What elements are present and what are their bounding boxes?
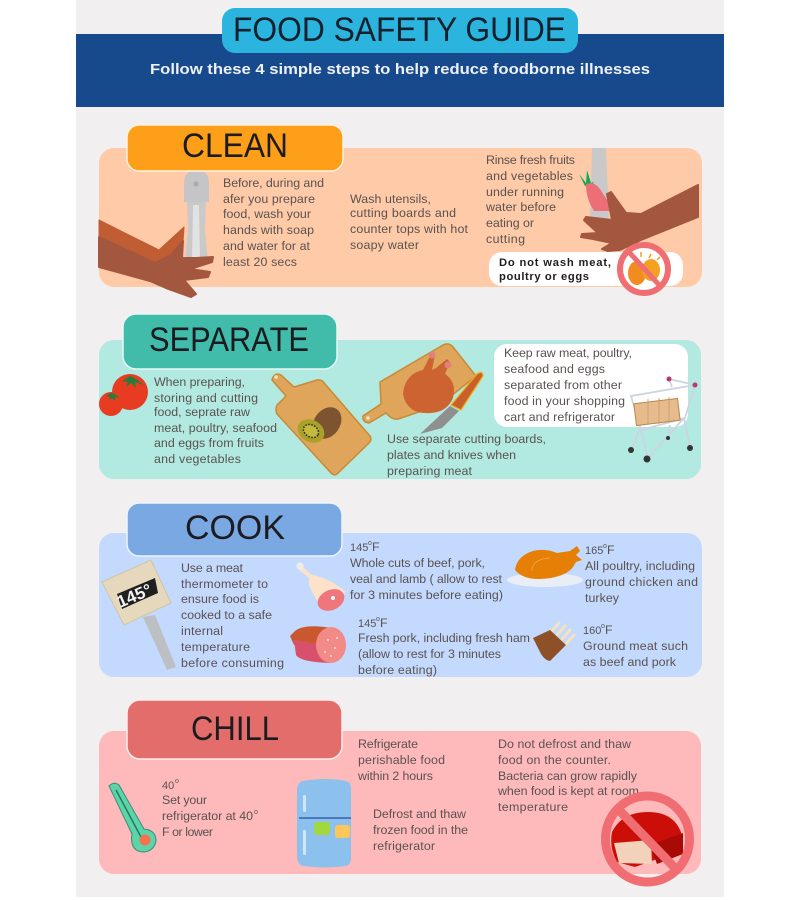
text: do not defrost bbox=[497, 737, 639, 814]
text: hands: Before, during and bbox=[223, 176, 324, 190]
heading: separate: SEPARATE bbox=[149, 321, 309, 359]
text: rinse: cutting bbox=[486, 232, 525, 246]
text: poultry: ground chicken and bbox=[585, 575, 698, 589]
text: rinse: eating or bbox=[486, 216, 534, 230]
icon: cutting board with kiwi bbox=[272, 374, 371, 475]
callout: do not wash meat bbox=[489, 252, 683, 286]
text: utensils: cutting boards and bbox=[350, 206, 456, 220]
heading: chill bbox=[127, 700, 342, 759]
callout: keep raw meat: cart and refrigerator bbox=[504, 410, 615, 424]
panel: clean bbox=[99, 148, 702, 297]
text: preparing: and eggs from fruits bbox=[154, 436, 264, 450]
heading: separate bbox=[123, 314, 337, 369]
heading: chill: CHILL bbox=[191, 710, 279, 748]
text: ground meat: 160 bbox=[583, 625, 601, 637]
text: hands: least 20 secs bbox=[223, 255, 297, 269]
text: poultry: turkey bbox=[585, 591, 620, 605]
text: refrigerate: perishable food bbox=[358, 753, 445, 767]
text: do not defrost: temperature bbox=[498, 800, 568, 814]
panel: separate bbox=[99, 340, 701, 479]
text: separate boards bbox=[387, 432, 546, 478]
text: rinse: water before bbox=[485, 200, 556, 214]
text: hands: and water for at bbox=[223, 239, 311, 253]
icon: ham bbox=[296, 562, 348, 615]
text: separate boards: plates and knives when bbox=[387, 448, 516, 462]
text: refrigerate: Refrigerate bbox=[358, 737, 418, 751]
text: refrigerate bbox=[357, 737, 445, 783]
callout: keep raw meat: separated from other bbox=[504, 378, 622, 392]
text: utensils bbox=[350, 192, 469, 252]
text: hands: food, wash your bbox=[223, 207, 311, 221]
text: fresh pork: o bbox=[376, 616, 380, 623]
text: refrigerator temperature: F or lower bbox=[162, 825, 213, 839]
text: poultry: F bbox=[607, 543, 615, 557]
text: hands: hands with soap bbox=[223, 223, 314, 237]
heading: cook bbox=[127, 503, 342, 556]
text: rinse: under running bbox=[486, 185, 564, 199]
text: ground meat: F bbox=[605, 623, 613, 637]
text: do not defrost: food on the counter. bbox=[498, 753, 611, 767]
text: hands: afer you prepare bbox=[223, 192, 315, 206]
text: refrigerate: within 2 hours bbox=[357, 769, 433, 783]
icon: tomatoes bbox=[99, 374, 148, 416]
text: refrigerator temperature: refrigerator at 40 bbox=[162, 809, 253, 823]
panel: cook bbox=[99, 533, 702, 677]
text: fresh pork: Fresh pork, including fresh ham bbox=[358, 631, 530, 645]
icon: meat thermometer bbox=[102, 560, 176, 670]
text: whole cuts: Whole cuts of beef, pork, bbox=[350, 556, 485, 570]
text: preparing: meat, poultry, seafood bbox=[154, 421, 277, 435]
text: rinse: Rinse fresh fruits bbox=[486, 153, 575, 167]
text: poultry: 165 bbox=[585, 545, 603, 557]
text: do not defrost: when food is kept at room bbox=[497, 784, 639, 798]
text: thermometer: Use a meat bbox=[181, 561, 244, 575]
text: poultry: o bbox=[603, 543, 607, 550]
icon: faucet and washing hands bbox=[99, 170, 213, 297]
text: fresh pork bbox=[358, 616, 530, 677]
text: preparing: storing and cutting bbox=[154, 391, 258, 405]
subtitle: Follow these 4 simple steps to help reduce foodborne illnesses bbox=[150, 62, 650, 78]
text: defrost bbox=[373, 807, 468, 853]
text: utensils: Wash utensils, bbox=[350, 192, 431, 206]
icon: shopping cart bbox=[628, 376, 698, 462]
text: preparing: and vegetables bbox=[154, 452, 241, 466]
text: rinse: and vegetables bbox=[486, 169, 573, 183]
text: thermometer: before consuming bbox=[181, 656, 284, 670]
text: defrost: refrigerator bbox=[373, 839, 435, 853]
text: rinse bbox=[485, 153, 575, 246]
text: refrigerator temperature: 40 bbox=[162, 780, 174, 792]
text: fresh pork: (allow to rest for 3 minutes bbox=[358, 647, 501, 661]
text: whole cuts: for 3 minutes before eating) bbox=[350, 588, 503, 602]
text: preparing: food, seprate raw bbox=[154, 405, 250, 419]
panel: chill bbox=[99, 731, 701, 882]
text: poultry bbox=[585, 543, 698, 605]
icon: ribs bbox=[533, 623, 574, 661]
text: separate boards: preparing meat bbox=[387, 464, 473, 478]
text: fresh pork: before eating) bbox=[358, 663, 437, 677]
text: fresh pork: F bbox=[380, 616, 388, 630]
text: refrigerator temperature: o bbox=[175, 778, 179, 785]
text: utensils: soapy water bbox=[350, 238, 419, 252]
text: thermometer: ensure food is bbox=[181, 592, 259, 606]
text: thermometer: cooked to a safe bbox=[181, 608, 272, 622]
text: thermometer: temperature bbox=[181, 640, 250, 654]
text: refrigerator temperature: o bbox=[254, 809, 258, 816]
text: whole cuts: F bbox=[372, 540, 380, 554]
text: preparing: When preparing, bbox=[154, 375, 245, 389]
text: thermometer: thermometer to bbox=[181, 577, 268, 591]
title: FOOD SAFETY GUIDE bbox=[233, 11, 566, 49]
callout: do not wash meat: poultry or eggs bbox=[499, 271, 589, 283]
text: whole cuts: 145 bbox=[350, 542, 368, 554]
text: refrigerator temperature: Set your bbox=[162, 793, 207, 807]
icon: carrot under running water with hand bbox=[579, 148, 698, 251]
text: refrigerator temperature bbox=[162, 778, 258, 839]
text: whole cuts: veal and lamb ( allow to rest bbox=[350, 572, 503, 586]
text: ground meat bbox=[583, 623, 688, 669]
text: ground meat: as beef and pork bbox=[583, 655, 677, 669]
text: ground meat: Ground meat such bbox=[583, 639, 688, 653]
text: ground meat: o bbox=[601, 623, 605, 630]
icon: no raw meat bbox=[606, 796, 690, 882]
heading: clean: CLEAN bbox=[182, 127, 288, 165]
callout: keep raw meat: Keep raw meat, poultry, bbox=[504, 346, 632, 360]
text: hands bbox=[223, 176, 324, 269]
text: separate boards: Use separate cutting boards, bbox=[387, 432, 546, 446]
icon: thermometer bbox=[109, 783, 156, 852]
icon: sausage bbox=[290, 626, 346, 663]
text: do not defrost: Bacteria can grow rapidly bbox=[498, 769, 638, 783]
text: defrost: Defrost and thaw bbox=[373, 807, 466, 821]
callout: keep raw meat: seafood and eggs bbox=[504, 362, 605, 376]
text: thermometer bbox=[181, 561, 284, 670]
text: fresh pork: 145 bbox=[358, 618, 376, 630]
callout: keep raw meat: food in your shopping bbox=[504, 394, 625, 408]
heading: cook: COOK bbox=[185, 509, 285, 547]
callout: keep raw meat bbox=[494, 344, 688, 427]
callout: do not wash meat: Do not wash meat, bbox=[499, 257, 611, 269]
text: utensils: counter tops with hot bbox=[350, 222, 469, 236]
text: defrost: frozen food in the bbox=[373, 823, 468, 837]
header banner bbox=[76, 34, 724, 107]
heading: clean bbox=[127, 125, 343, 171]
icon: cutting board with chicken and knife bbox=[363, 344, 483, 434]
text: preparing bbox=[154, 375, 277, 466]
text: whole cuts: o bbox=[368, 540, 372, 547]
text: do not defrost: Do not defrost and thaw bbox=[498, 737, 631, 751]
text: whole cuts bbox=[350, 540, 503, 602]
text: poultry: All poultry, including bbox=[585, 559, 695, 573]
icon: roast turkey bbox=[507, 546, 583, 587]
icon: meat thermometer: 145° bbox=[114, 580, 155, 612]
icon: refrigerator bbox=[297, 779, 351, 868]
icon: no eggs bbox=[620, 245, 668, 293]
text: thermometer: internal bbox=[181, 624, 223, 638]
